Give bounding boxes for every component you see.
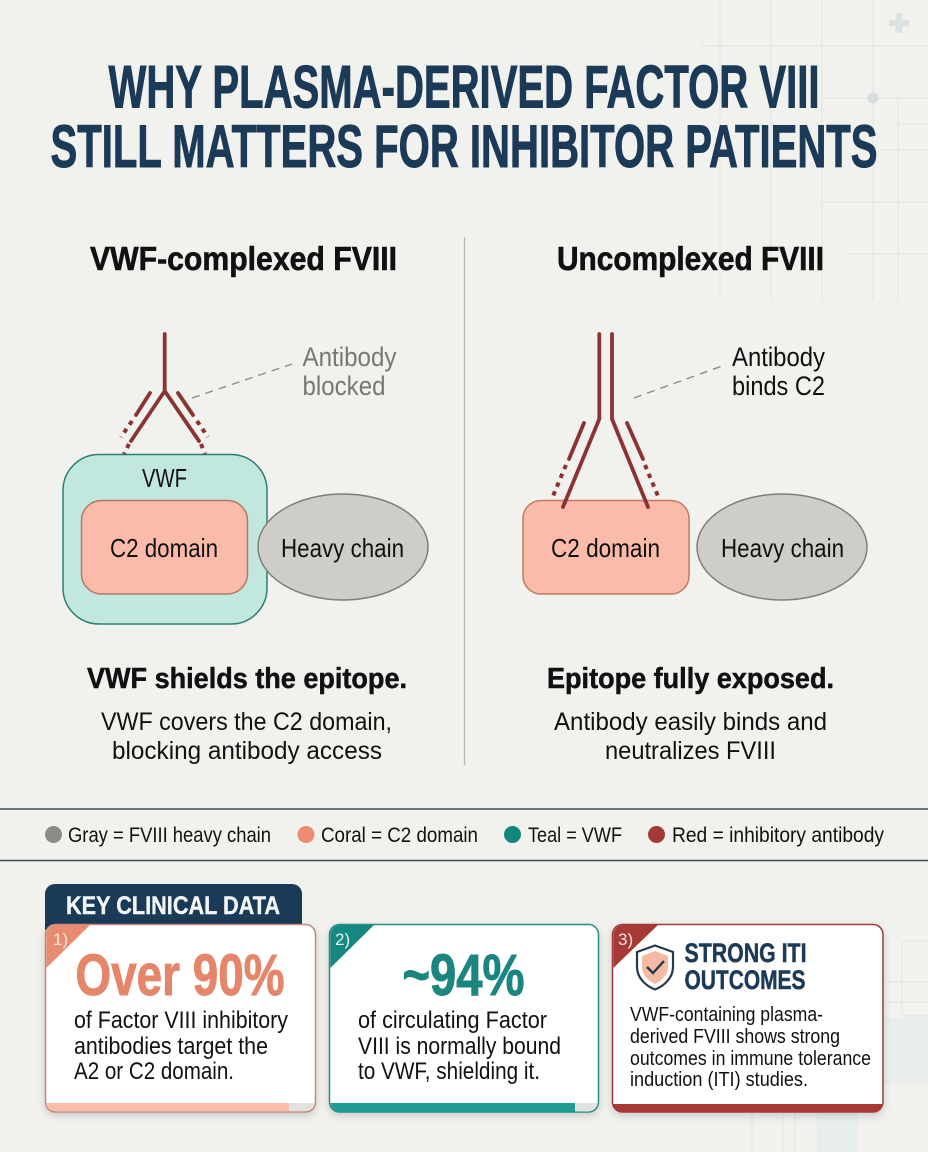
diagram: VWF shield: VWF (142, 463, 187, 493)
icon: blocked antibody (121, 334, 208, 454)
card 2: ~94% (330, 924, 598, 1112)
diagram: heavy chain (258, 494, 428, 600)
legend item: teal: Teal = VWF (528, 824, 622, 847)
card 1 body: A2 or C2 domain. (74, 1058, 234, 1085)
stat: ~94%: ~94% (402, 943, 524, 1008)
section tab: key clinical data: KEY CLINICAL DATA (66, 892, 280, 920)
caption: VWF shields: VWF shields the epitope. (87, 663, 407, 695)
caption: VWF shields (87, 663, 407, 765)
title (50, 54, 878, 180)
card 3 body: VWF-containing plasma- (630, 1003, 823, 1026)
card 3: strong ITI outcomes (612, 924, 883, 1112)
card 3 body: derived FVIII shows strong (630, 1025, 840, 1048)
legend item: red: Red = inhibitory antibody (672, 824, 884, 847)
card 3 body: induction (ITI) studies. (630, 1068, 808, 1091)
section tab: key clinical data (45, 884, 302, 930)
corner badge 2: 2) (335, 930, 350, 949)
label: antibody binds C2: Antibody (732, 342, 825, 372)
diagram: C2 domain (82, 500, 248, 594)
caption: VWF shields: VWF covers the C2 domain, (101, 708, 392, 736)
diagram: exposed C2 domain (523, 500, 689, 594)
label: antibody binds C2: binds C2 (732, 371, 825, 401)
card 3 heading: OUTCOMES (684, 965, 806, 995)
diagram: heavy chain: Heavy chain (721, 533, 844, 563)
card 2 body: to VWF, shielding it. (358, 1058, 540, 1085)
caption: VWF shields: blocking antibody access (112, 737, 382, 765)
label: antibody blocked (302, 342, 397, 401)
label: antibody blocked: blocked (302, 371, 386, 401)
card 3 body: outcomes in immune tolerance (630, 1047, 871, 1070)
corner badge 1 (46, 925, 90, 968)
card 2 body (358, 1007, 561, 1085)
card 3 heading (684, 938, 806, 995)
heading: Uncomplexed: Uncomplexed FVIII (557, 240, 824, 277)
icon: decorative dot (868, 92, 878, 104)
legend item: coral: Coral = C2 domain (321, 824, 478, 847)
label: antibody blocked: Antibody (302, 342, 397, 372)
caption: epitope exposed: Antibody easily binds and (554, 708, 827, 736)
card 2 body: of circulating Factor (358, 1007, 547, 1034)
card 3 body (630, 1003, 871, 1091)
card 1 body: of Factor VIII inhibitory (74, 1007, 288, 1034)
card 2 body: VIII is normally bound (358, 1033, 561, 1060)
card 3 heading: STRONG ITI (684, 938, 806, 968)
diagram: C2 domain: C2 domain (110, 533, 218, 563)
caption: epitope exposed: Epitope fully exposed. (547, 663, 834, 695)
leader line (192, 364, 292, 398)
panel: VWF-complexed FVIII (63, 240, 428, 765)
stat: over 90%: Over 90% (76, 943, 284, 1008)
diagram: heavy chain (697, 494, 867, 600)
icon: bound antibody (553, 334, 658, 507)
caption: epitope exposed: neutralizes FVIII (605, 737, 776, 765)
card 1: over 90% (46, 924, 316, 1112)
legend item: gray: Gray = FVIII heavy chain (68, 824, 271, 847)
label: antibody binds C2 (732, 342, 825, 401)
caption: epitope exposed (547, 663, 834, 765)
icon: shield with check (637, 946, 673, 990)
corner badge 3 (613, 925, 658, 968)
diagram: heavy chain: Heavy chain (281, 533, 404, 563)
corner badge 2 (330, 925, 374, 968)
card 1 body: antibodies target the (74, 1033, 268, 1060)
diagram: VWF shield (63, 454, 267, 624)
legend (0, 809, 928, 860)
leader line (634, 366, 722, 398)
heading: VWF-complexed: VWF-complexed FVIII (90, 240, 397, 277)
card 1 body (74, 1007, 288, 1085)
diagram: exposed C2 domain: C2 domain (551, 533, 660, 563)
corner badge 1: 1) (53, 930, 68, 949)
icon: decorative plus (889, 13, 909, 33)
panel: Uncomplexed FVIII (523, 240, 867, 765)
corner badge 3: 3) (618, 930, 633, 949)
